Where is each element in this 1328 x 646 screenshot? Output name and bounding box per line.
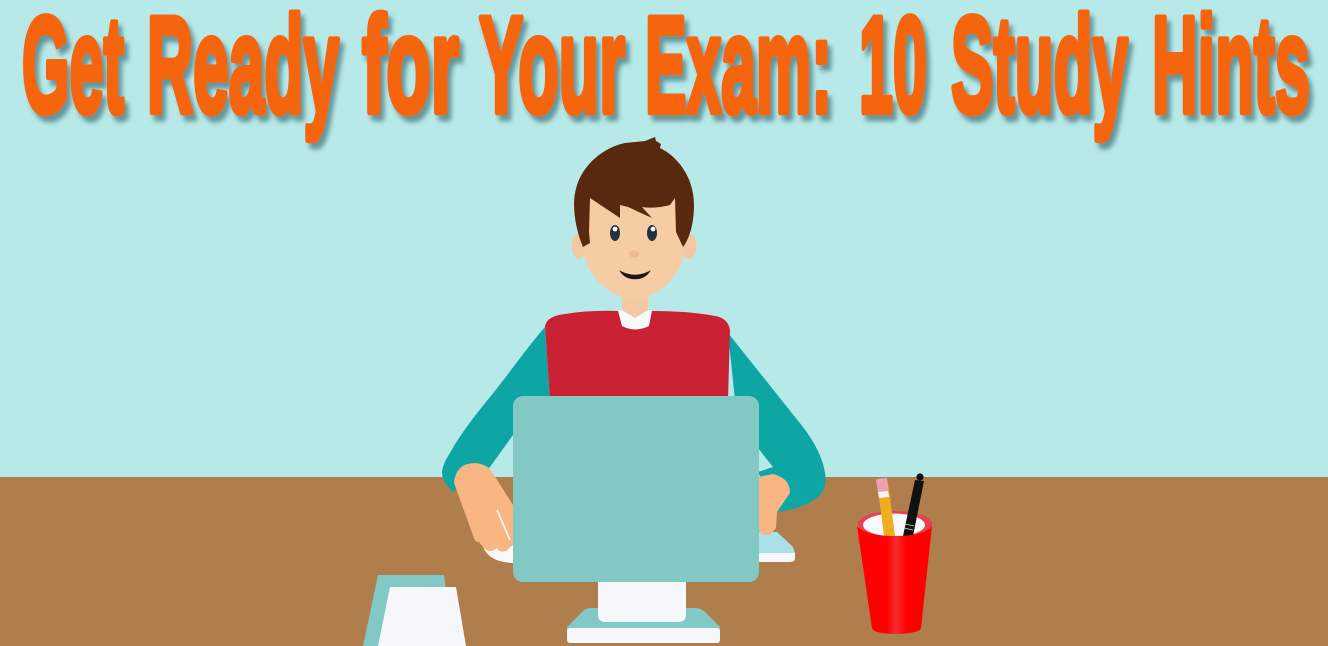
neck — [622, 290, 648, 318]
pen — [903, 473, 924, 536]
left eye — [610, 225, 620, 241]
title — [22, 0, 1310, 142]
monitor stand — [598, 580, 686, 622]
stack of papers — [363, 575, 466, 646]
left hand — [454, 463, 513, 552]
ears — [572, 233, 586, 259]
right hand — [758, 474, 790, 535]
right arm — [728, 333, 826, 512]
monitor base — [567, 608, 720, 643]
monitor — [513, 396, 759, 643]
pencil — [876, 478, 895, 536]
head — [572, 137, 696, 300]
light gap behind right arm — [758, 448, 773, 472]
face — [585, 190, 683, 300]
collar — [618, 310, 652, 330]
right eye — [647, 225, 657, 241]
smile — [620, 271, 650, 279]
left mouse — [482, 530, 513, 563]
pencil cup — [857, 473, 932, 634]
wall background — [0, 0, 1328, 478]
cup body — [857, 526, 932, 634]
cup inner — [858, 511, 932, 537]
monitor screen — [513, 396, 759, 582]
finger gap — [497, 510, 510, 540]
right mouse — [759, 532, 795, 561]
nose — [628, 250, 640, 258]
sweater — [545, 311, 730, 400]
desk — [0, 477, 1328, 646]
student figure — [442, 137, 826, 563]
hair — [574, 137, 694, 247]
left arm — [442, 327, 550, 492]
